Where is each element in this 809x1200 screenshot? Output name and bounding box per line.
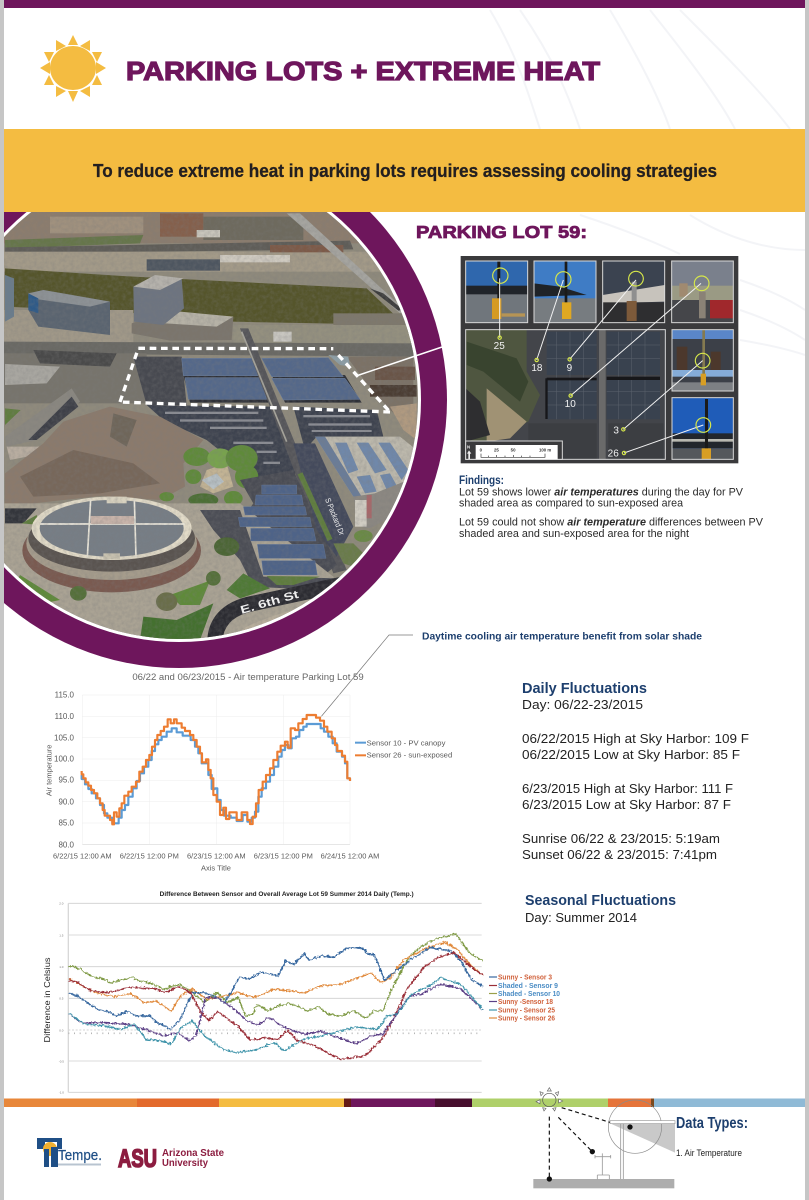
daily fluctuations text: Sunrise 06/22 & 23/2015: 5:19am bbox=[522, 831, 720, 846]
aerial photo of parking lot 59 bbox=[0, 210, 433, 650]
findings text: Lot 59 could not show air temperature differences between PV bbox=[459, 516, 764, 528]
daily fluctuations text: 06/22/2015 High at Sky Harbor: 109 F bbox=[522, 731, 749, 746]
chart legend bbox=[355, 738, 452, 760]
photo: sensor 25 bbox=[466, 261, 528, 323]
scale bar: 50 bbox=[511, 447, 516, 452]
yellow subtitle band bbox=[0, 129, 809, 212]
purple ring bbox=[0, 132, 447, 668]
line chart: air temperature parking lot 59: 95.0 bbox=[58, 776, 75, 785]
photo: sensor 18 bbox=[534, 261, 596, 323]
line chart: air temperature parking lot 59: Axis Title bbox=[201, 863, 231, 872]
data types list: 1. Air Temperature bbox=[676, 1148, 742, 1158]
footer colour strip bbox=[4, 1098, 806, 1107]
white ring bbox=[0, 158, 421, 642]
scale bar: 100 m bbox=[539, 447, 551, 452]
logo: Tempe: Tempe. bbox=[58, 1147, 102, 1164]
photo: sensor 26 bbox=[672, 398, 733, 459]
diagram: sun, canopy and sensor positions bbox=[533, 1088, 675, 1188]
page edge strip right bbox=[805, 0, 809, 1200]
street label: S Packard Dr: S Packard Dr bbox=[323, 497, 346, 537]
pointer line from photo to sensor map bbox=[356, 347, 442, 376]
seasonal fluctuations text: Seasonal Fluctuations bbox=[525, 892, 676, 909]
title: PARKING LOTS + EXTREME HEAT bbox=[126, 56, 600, 86]
sensor numbers: 25 bbox=[494, 341, 505, 352]
daily fluctuations text bbox=[522, 680, 749, 862]
chart legend: sensors: Shaded - Sensor 10 bbox=[498, 989, 560, 998]
line chart: air temperature parking lot 59: 6/23/15 12:00 AM bbox=[187, 852, 246, 861]
sensor numbers: 3 bbox=[613, 425, 619, 436]
line chart: air temperature parking lot 59: 100.0 bbox=[54, 755, 75, 764]
line chart: air temperature parking lot 59: 06/22 and 06/23/2015 - Air temperature Parking Lot 59 bbox=[132, 672, 364, 682]
line chart: difference between sensor and overall average: 0.5 bbox=[59, 997, 64, 1001]
data types heading: Data Types: bbox=[676, 1115, 748, 1132]
line chart: air temperature parking lot 59: 6/22/15 12:00 PM bbox=[120, 852, 179, 861]
icon: sun bbox=[40, 35, 106, 102]
sensor numbers: 26 bbox=[608, 448, 619, 459]
line chart: air temperature parking lot 59: 90.0 bbox=[58, 797, 75, 806]
daily fluctuations text: Sunset 06/22 & 23/2015: 7:41pm bbox=[522, 847, 717, 862]
sensor numbers: 18 bbox=[531, 363, 543, 374]
scale bar: 0 bbox=[480, 447, 483, 452]
logo: Tempe bbox=[37, 1138, 102, 1167]
line chart: air temperature parking lot 59: 85.0 bbox=[58, 819, 75, 828]
chart legend: Sensor 26 - sun-exposed bbox=[367, 751, 452, 760]
line chart: air temperature parking lot 59: 6/22/15 12:00 AM bbox=[53, 852, 112, 861]
street label: E. 6th St: E. 6th St bbox=[239, 589, 300, 617]
photo: sensor 3 bbox=[672, 330, 733, 391]
chart legend: sensors bbox=[489, 972, 560, 1022]
sensor numbers: 9 bbox=[567, 363, 573, 374]
photo: sensor 9 bbox=[603, 261, 665, 323]
logo: Arizona State University: University bbox=[162, 1157, 208, 1169]
daily fluctuations text: Day: 06/22-23/2015 bbox=[522, 697, 643, 712]
daily fluctuations text: 06/22/2015 Low at Sky Harbor: 85 F bbox=[522, 747, 740, 762]
line chart: difference between sensor and overall average: -1.0 bbox=[59, 1091, 64, 1095]
line chart: air temperature parking lot 59: 105.0 bbox=[54, 733, 75, 742]
line chart: air temperature parking lot 59: 110.0 bbox=[55, 712, 75, 721]
line chart: difference between sensor and overall average: 1.5 bbox=[59, 933, 64, 937]
satellite map bbox=[466, 330, 665, 459]
logo: Arizona State University: ASU bbox=[118, 1145, 157, 1173]
daily fluctuations text: 6/23/2015 Low at Sky Harbor: 87 F bbox=[522, 797, 731, 812]
line chart: air temperature parking lot 59: Air temperature bbox=[44, 745, 53, 796]
seasonal fluctuations text: Day: Summer 2014 bbox=[525, 910, 637, 925]
heading: parking lot 59: PARKING LOT 59: bbox=[416, 222, 587, 242]
findings text bbox=[459, 473, 764, 540]
line chart: difference between sensor and overall average: 1.0 bbox=[59, 965, 64, 969]
line chart: air temperature parking lot 59: 115.0 bbox=[55, 690, 75, 699]
line chart: difference between sensor and overall average: Difference in Celsius bbox=[43, 957, 52, 1042]
findings text: shaded area and sun-exposed area for the night bbox=[459, 528, 689, 540]
findings text: shaded area as compared to sun-exposed area bbox=[459, 498, 684, 510]
line chart: difference between sensor and overall average: Difference Between Sensor and Overall Average Lot 59 Summer 2014 Daily (Temp.) bbox=[160, 891, 414, 898]
daily fluctuations text: 6/23/2015 High at Sky Harbor: 111 F bbox=[522, 781, 733, 796]
sensor target circles bbox=[493, 268, 711, 455]
line chart: difference between sensor and overall average: 0.0 bbox=[59, 1028, 64, 1032]
chart legend: sensors: Sunny -Sensor 18 bbox=[498, 997, 553, 1006]
findings text: Lot 59 shows lower air temperatures during the day for PV bbox=[459, 486, 744, 498]
line chart: difference between sensor and overall average: 2.0 bbox=[59, 902, 64, 906]
chart legend: sensors: Shaded - Sensor 9 bbox=[498, 981, 558, 990]
line chart: air temperature parking lot 59 bbox=[44, 672, 452, 872]
sensor connector lines bbox=[500, 278, 703, 453]
dashed study area outline bbox=[120, 348, 390, 412]
callout: daytime cooling bbox=[320, 630, 702, 718]
photo: sensor 10 bbox=[672, 261, 733, 323]
page edge strip left bbox=[0, 0, 4, 1200]
line chart: air temperature parking lot 59: 80.0 bbox=[58, 840, 75, 849]
logo: Arizona State University bbox=[118, 1145, 224, 1173]
logo: Arizona State University: Arizona State bbox=[162, 1147, 224, 1159]
panel: sensor location map with photos bbox=[461, 256, 738, 463]
chart legend: sensors: Sunny - Sensor 3 bbox=[498, 972, 552, 982]
seasonal fluctuations text bbox=[525, 892, 676, 925]
daily fluctuations text: Daily Fluctuations bbox=[522, 680, 647, 697]
sensor numbers: 10 bbox=[565, 399, 576, 410]
scale bar: 25 bbox=[494, 447, 499, 452]
chart legend: sensors: Sunny - Sensor 25 bbox=[498, 1006, 556, 1014]
line chart: difference between sensor and overall average bbox=[43, 891, 482, 1095]
chart legend: Sensor 10 - PV canopy bbox=[367, 738, 446, 747]
scale bar bbox=[466, 441, 562, 459]
top purple bar bbox=[0, 0, 809, 8]
callout: daytime cooling: Daytime cooling air temperature benefit from solar shade bbox=[422, 630, 702, 642]
line chart: difference between sensor and overall average: -0.5 bbox=[59, 1059, 64, 1063]
line chart: air temperature parking lot 59: 6/23/15 12:00 PM bbox=[254, 852, 313, 861]
subtitle: To reduce extreme heat in parking lots requires assessing cooling strategies bbox=[93, 161, 717, 181]
sensor numbers bbox=[494, 341, 619, 459]
chart legend: sensors: Sunny - Sensor 26 bbox=[498, 1014, 555, 1022]
scale bar: N bbox=[467, 444, 470, 449]
line chart: air temperature parking lot 59: 6/24/15 12:00 AM bbox=[321, 852, 379, 861]
findings text: Findings: bbox=[459, 473, 504, 487]
